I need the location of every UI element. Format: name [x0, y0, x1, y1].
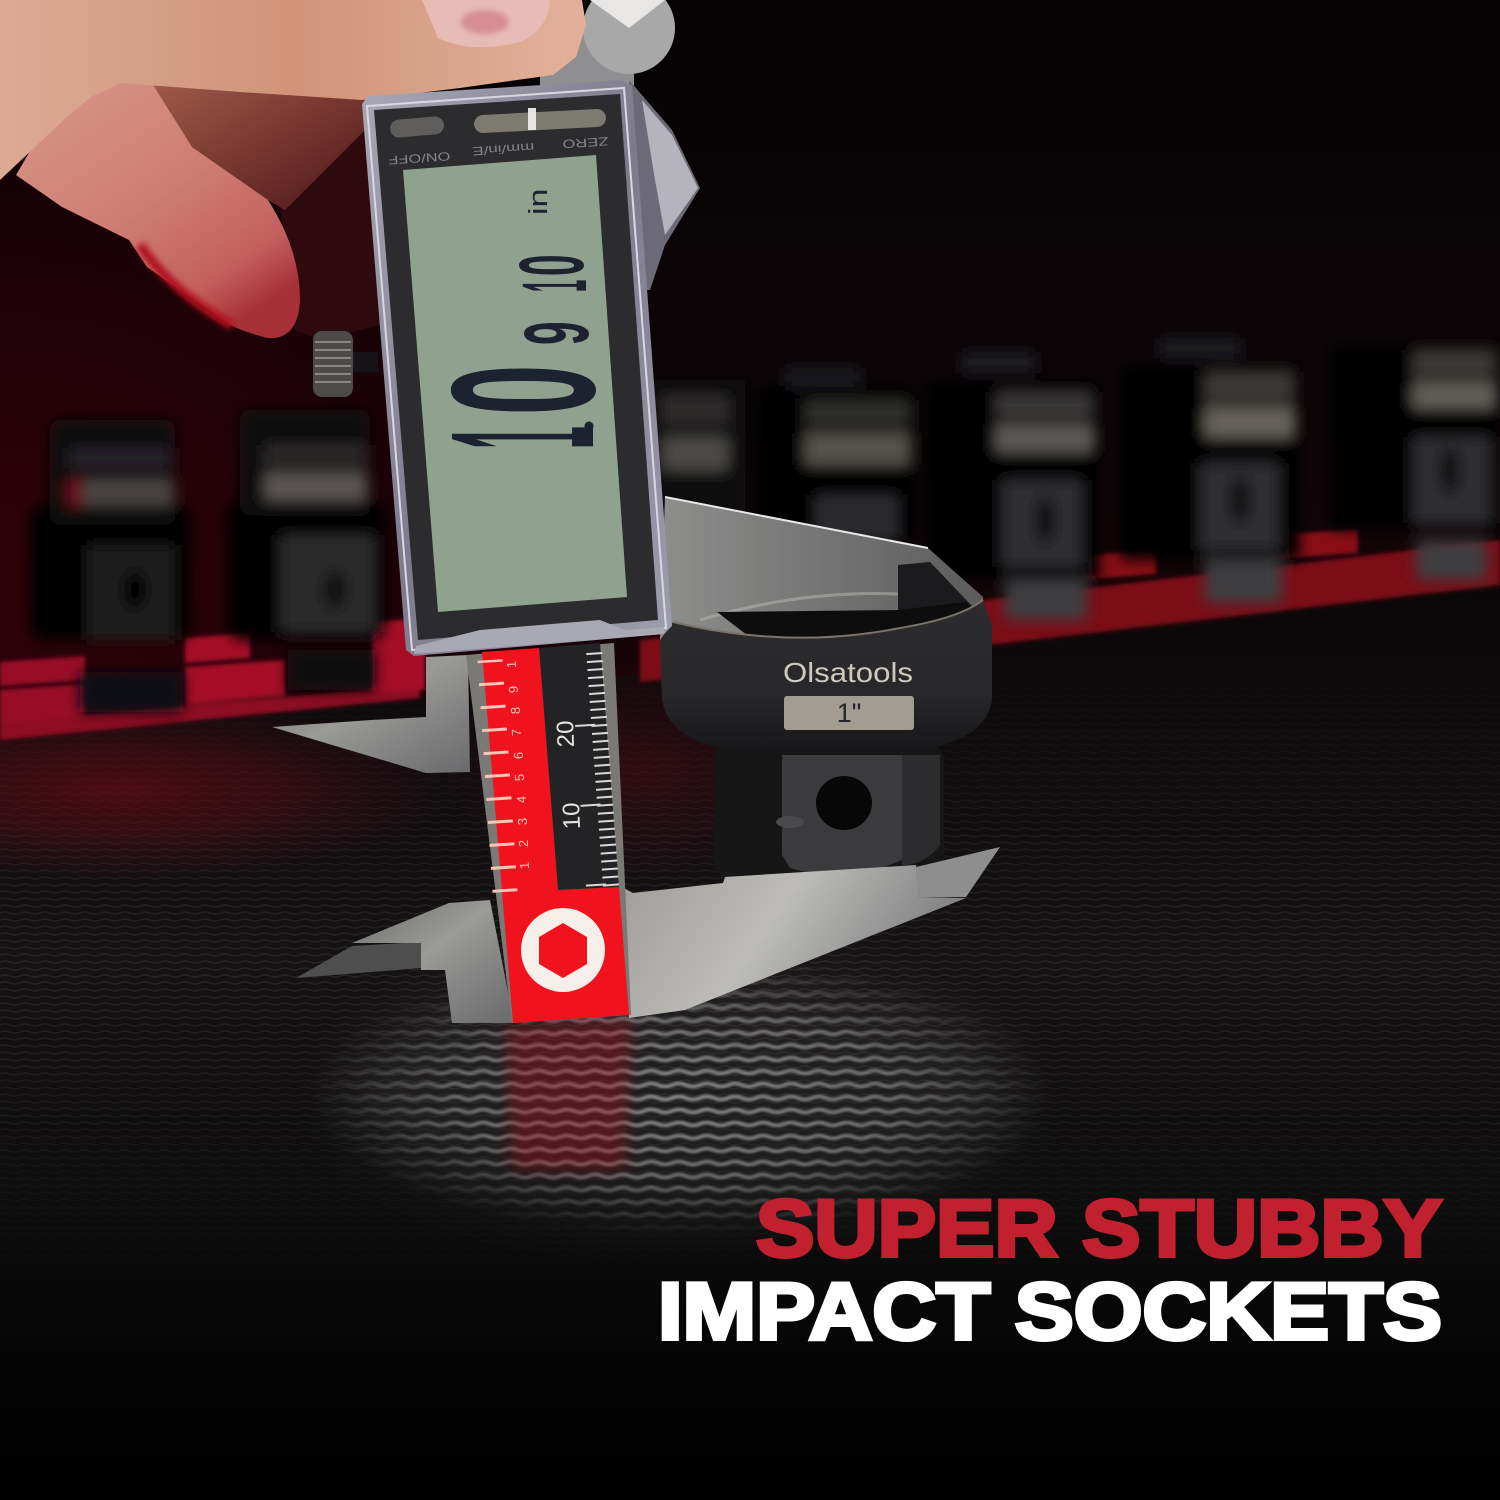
- red rim light: [140, 245, 232, 326]
- red socket rail: [0, 529, 1500, 740]
- red scale numbers: 7: [509, 729, 524, 736]
- red scale numbers: 6: [511, 752, 526, 759]
- socket size plate: [784, 696, 914, 730]
- red scale numbers: 9: [506, 686, 521, 693]
- LCD screen: [403, 155, 627, 612]
- caliper beam: [466, 643, 631, 1023]
- housing bottom lip: [414, 620, 664, 654]
- socket drive: [714, 745, 944, 877]
- fingernail: [422, 0, 550, 47]
- socket ring inner wall: [717, 602, 983, 645]
- LCD readout: 0: [500, 255, 603, 276]
- LCD readout: 1: [409, 426, 637, 449]
- caliper top metal and thumb wheel: [540, 0, 700, 290]
- front finger: [16, 65, 300, 338]
- blurred socket 7: [1330, 345, 1500, 580]
- upper finger and thumb: [0, 0, 586, 180]
- red scale numbers: 3: [515, 818, 530, 825]
- blurred socket 6: [1120, 338, 1300, 603]
- floor mat: [0, 688, 1500, 1500]
- blurred socket 1: [30, 420, 190, 712]
- socket brand: Olsatools: [783, 657, 913, 688]
- socket hole: [816, 776, 872, 830]
- red scale numbers: 8: [508, 707, 523, 714]
- metric-sized impact socket: [660, 600, 992, 877]
- lower left caliper jaw: [296, 900, 514, 1023]
- black scale numbers: 20: [552, 720, 580, 748]
- red scale numbers: 4: [514, 796, 529, 803]
- thumb screw: [313, 331, 378, 397]
- headline: super stubby: SUPER STUBBY: [756, 1184, 1442, 1274]
- scale tick marks: [490, 650, 611, 892]
- red scale numbers: 1: [517, 862, 532, 869]
- black scale numbers: 10: [558, 802, 586, 830]
- LCD readout: 0: [409, 365, 638, 415]
- headline: impact sockets: IMPACT SOCKETS: [658, 1267, 1442, 1357]
- red scale numbers: [504, 661, 532, 869]
- button labels: [388, 134, 609, 167]
- LCD readout: [409, 189, 638, 449]
- lower right caliper jaw: [622, 847, 1000, 1018]
- red scale numbers: 1: [504, 661, 519, 668]
- LCD readout: in: [525, 189, 553, 215]
- blurred socket 4: [755, 368, 915, 545]
- red scale numbers: 2: [516, 840, 531, 847]
- button labels: mm/in/E: [472, 140, 535, 158]
- blurred row of sockets: [30, 338, 1500, 712]
- red metric band: [482, 648, 629, 1023]
- LCD readout: 1: [503, 280, 607, 292]
- upper right caliper jaw: [660, 497, 985, 640]
- button labels: ZERO: [562, 134, 609, 151]
- dark finger behind: [280, 125, 380, 340]
- hand holding caliper: [0, 0, 586, 340]
- housing buttons: [389, 108, 606, 138]
- black scale numbers: [552, 720, 586, 830]
- button labels: ON/OFF: [388, 149, 451, 167]
- hexagon logo: [521, 908, 605, 992]
- socket body: [660, 600, 992, 753]
- red scale numbers: 5: [512, 774, 527, 781]
- blurred socket 2: [228, 410, 385, 690]
- socket size plate: 1": [837, 698, 861, 728]
- blurred socket 5: [925, 352, 1100, 620]
- blurred socket 3: [650, 380, 745, 540]
- caliper display housing: [362, 80, 672, 656]
- upper left caliper jaw: [272, 655, 470, 773]
- second finger: [130, 70, 365, 210]
- LCD readout: 9: [506, 321, 609, 345]
- black scale band: [539, 643, 619, 890]
